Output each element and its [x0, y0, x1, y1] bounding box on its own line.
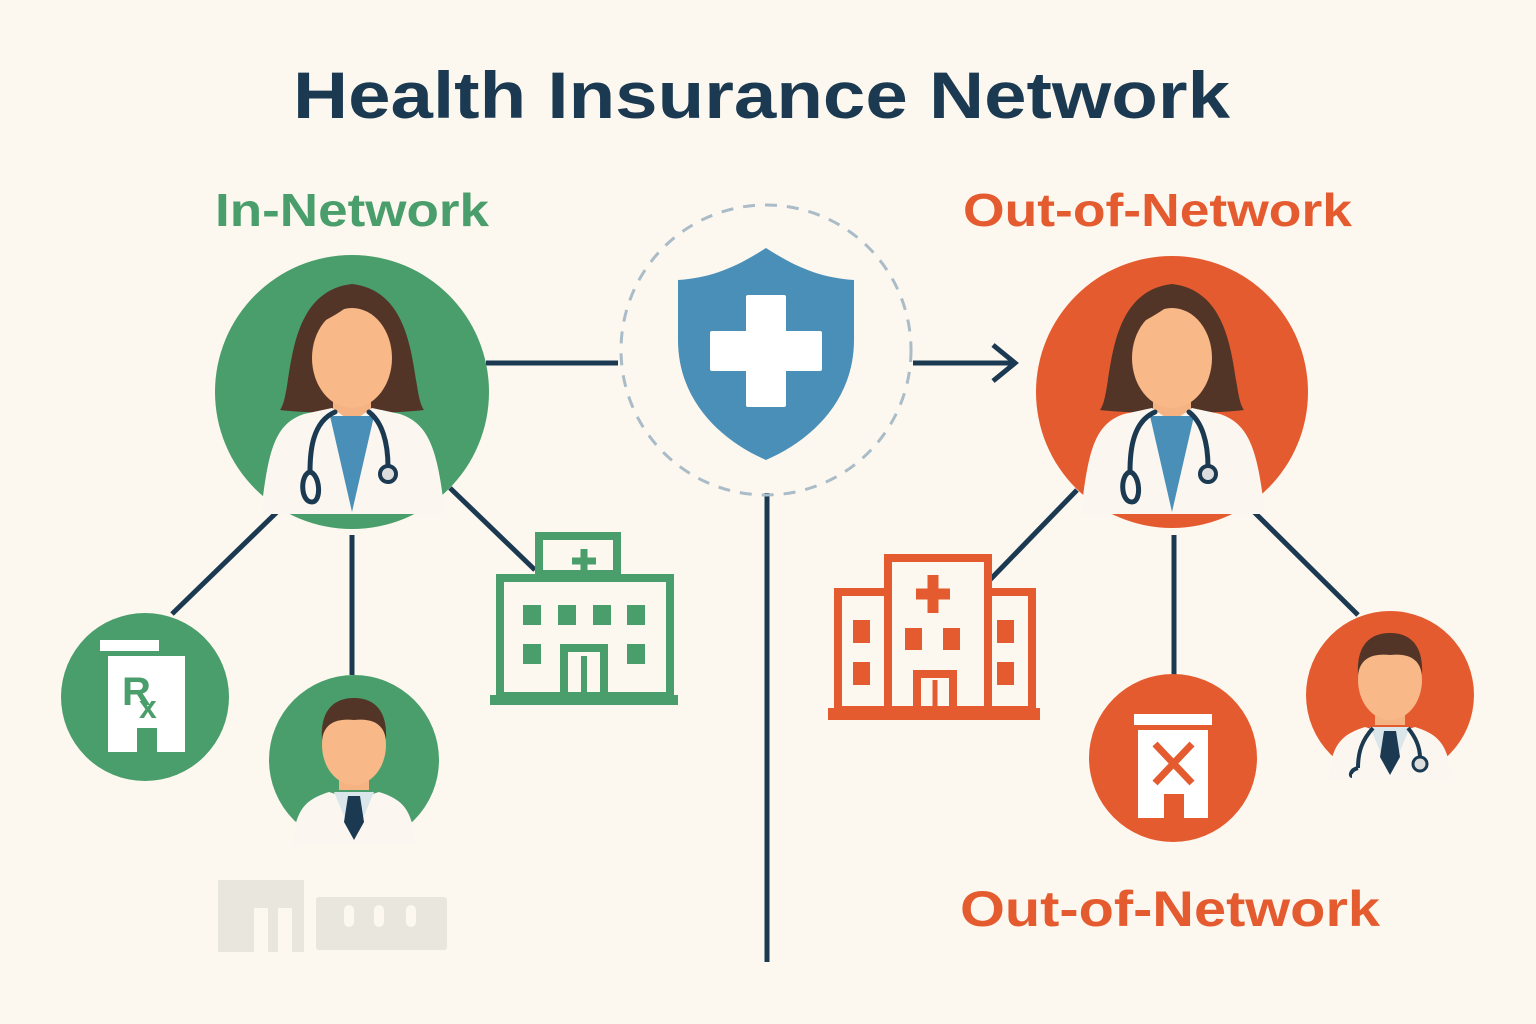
out-of-network male doctor [1306, 611, 1474, 780]
label: out-of-network bottom: Out-of-Network [960, 881, 1380, 937]
icon: in-network pharmacy Rx: R [122, 670, 151, 714]
heading: out-of-network: Out-of-Network [963, 184, 1352, 236]
in-network male doctor [269, 675, 439, 845]
icon: insurance shield [621, 205, 911, 495]
icon: out-of-network pharmacy with X [1089, 674, 1257, 842]
icon: in-network pharmacy Rx: x [139, 689, 157, 725]
connector lines [172, 345, 1358, 962]
heading: in-network: In-Network [215, 184, 489, 236]
in-network female doctor [215, 255, 489, 529]
out-of-network female doctor [1036, 256, 1308, 528]
icon: out-of-network hospital [828, 558, 1040, 714]
icon: in-network pharmacy Rx [61, 613, 229, 781]
icon: in-network hospital [490, 536, 678, 700]
icon: faded building [218, 880, 447, 952]
title: Health Insurance Network [293, 58, 1230, 132]
